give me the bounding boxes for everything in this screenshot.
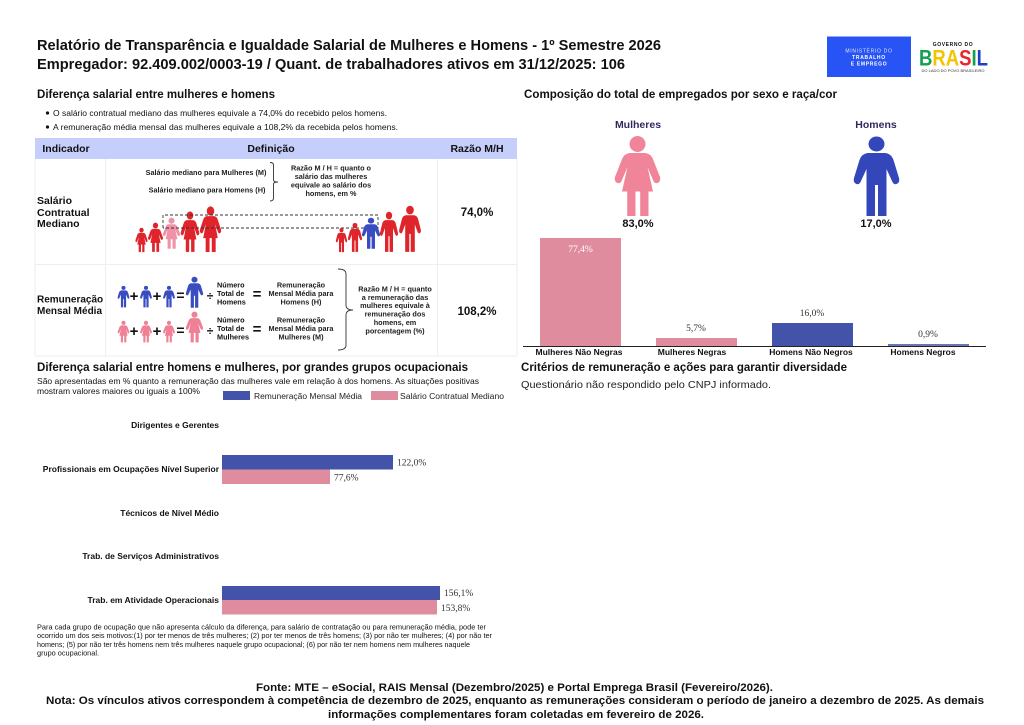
footnote: homens; (5) por não ter três homens nem três mulheres naquele grupo ocupacional; (6) por não ter nem homens nem mulheres naquele xyxy=(37,640,470,649)
formula: men: + xyxy=(130,288,139,305)
footer note: Fonte: MTE – eSocial, RAIS Mensal (Dezembro/2025) e Portal Emprega Brasil (Fevereiro/2026). xyxy=(256,682,773,694)
legend: Salário Contratual Mediano xyxy=(400,391,504,401)
bar chart: occupational groups: Profissionais em Ocupações Nível Superior xyxy=(43,464,220,474)
bar chart: composition by sex and race: Homens Negros xyxy=(890,347,956,357)
bar chart: occupational groups: Trab. em Atividade Operacionais xyxy=(88,595,219,605)
median comparison dashed lines xyxy=(163,215,378,228)
bar chart: composition by sex and race: 0,9% xyxy=(918,330,938,340)
bar chart: composition by sex and race: Mulheres Negras xyxy=(658,347,727,357)
text block: explanation: mostram valores maiores ou iguais a 100% xyxy=(37,386,201,396)
table header: Definição xyxy=(247,143,295,155)
definition: salário mediano: homens, em % xyxy=(305,189,357,198)
formula: women xyxy=(118,312,334,342)
icon: figures, men group xyxy=(336,206,421,252)
bar chart: composition by sex and race: Homens Não Negros xyxy=(769,347,853,357)
icon group: Homens share xyxy=(854,119,899,230)
logo: Governo do Brasil: DO LADO DO POVO BRASILEIRO xyxy=(922,68,984,73)
heading: composição: Composição do total de empregados por sexo e raça/cor xyxy=(524,89,838,101)
row label: Salário Contratual Mediano: Mediano xyxy=(37,218,80,230)
title xyxy=(37,38,661,73)
definition: razão remuneração: mulheres equivale à xyxy=(360,301,431,310)
definition: razão remuneração: a remuneração das xyxy=(362,293,428,302)
formula: women: ÷ xyxy=(207,324,214,338)
formula: women: Mensal Média para xyxy=(269,324,334,333)
formula: men xyxy=(118,277,334,308)
icon group: Mulheres share: 83,0% xyxy=(622,218,654,230)
text block: key findings xyxy=(46,108,398,132)
table header xyxy=(42,143,504,155)
definition: razão remuneração xyxy=(338,269,432,350)
row label: Remuneração Mensal Média: Remuneração xyxy=(37,294,103,306)
icon: figures, women group xyxy=(135,206,221,252)
logo: Ministério do Trabalho e Emprego xyxy=(827,36,911,77)
formula: women: = xyxy=(176,322,185,338)
bar chart: occupational groups: 153,8% xyxy=(441,604,470,614)
formula: women: Remuneração xyxy=(277,316,326,324)
value: 74,0%: 74,0% xyxy=(461,207,493,219)
formula: women: + xyxy=(130,323,139,340)
text block: explanation: São apresentadas em % quanto a remuneração das mulheres vale em relação à dos homens. As situações positivas xyxy=(37,376,479,386)
logo: Governo do Brasil: BRASIL xyxy=(919,46,988,70)
legend xyxy=(223,391,504,401)
bar chart: composition by sex and race: 16,0% xyxy=(800,309,824,319)
formula: men: Remuneração xyxy=(277,280,326,290)
formula: women: Mulheres (M) xyxy=(278,332,324,342)
formula: men: + xyxy=(153,288,162,305)
bar chart: composition by sex and race xyxy=(523,238,986,357)
logo: Ministério do Trabalho e Emprego: E EMPREGO xyxy=(851,62,887,68)
bar chart: composition by sex and race: Mulheres Não Negras xyxy=(536,347,623,357)
footer note: Nota: Os vínculos ativos correspondem à competência de dezembro de 2025, enquanto as remunerações consideram o período de janeiro a dezembro de 2025. As demais xyxy=(46,695,984,707)
bar chart: composition by sex and race: 5,7% xyxy=(686,324,706,334)
formula: men: ÷ xyxy=(207,289,214,303)
logo: Ministério do Trabalho e Emprego: MINISTÉRIO DO xyxy=(845,48,893,54)
formula: women: Total de xyxy=(217,324,244,333)
icon group: Mulheres share: Mulheres xyxy=(615,119,661,131)
formula: men: Homens (H) xyxy=(281,298,322,306)
row label: Salário Contratual Mediano: Contratual xyxy=(37,207,90,219)
definition: salário mediano: equivale ao salário dos xyxy=(291,180,371,190)
formula: men: = xyxy=(253,286,262,303)
definition: salário mediano xyxy=(146,162,372,201)
logo: Governo do Brasil: GOVERNO DO xyxy=(933,42,973,48)
footer note: informações complementares foram coletadas em fevereiro de 2026. xyxy=(328,709,704,721)
text block: explanation xyxy=(37,376,479,396)
row label: Remuneração Mensal Média: Mensal Média xyxy=(37,306,102,317)
bar chart: occupational groups: 77,6% xyxy=(334,474,359,484)
icon group: Homens share: Homens xyxy=(855,119,897,131)
table header: Razão M/H xyxy=(450,143,504,155)
definition: salário mediano: Razão M / H = quanto o xyxy=(291,164,372,172)
formula: men: = xyxy=(176,287,185,303)
formula: women: + xyxy=(153,323,162,340)
bar chart: occupational groups: 122,0% xyxy=(397,458,426,468)
definition: razão remuneração: Razão M / H = quanto xyxy=(358,284,432,294)
table header: Indicador xyxy=(42,143,90,155)
heading: critérios: Critérios de remuneração e ações para garantir diversidade xyxy=(521,362,847,374)
definition: salário mediano: Salário mediano para Mulheres (M) xyxy=(146,168,267,177)
panel: indicator table xyxy=(35,138,517,356)
formula: women: Mulheres xyxy=(217,332,249,342)
footnote xyxy=(37,622,493,658)
legend: Remuneração Mensal Média xyxy=(254,391,362,401)
bar chart: occupational groups: Técnicos de Nível Médio xyxy=(120,508,219,518)
heading: diferença salarial: Diferença salarial entre mulheres e homens xyxy=(37,89,275,101)
footer note xyxy=(46,682,984,721)
heading: grupos ocupacionais: Diferença salarial entre homens e mulheres, por grandes grupos ocupacionais xyxy=(37,362,468,374)
logo: Ministério do Trabalho e Emprego: TRABALHO xyxy=(852,55,886,61)
icon group: Mulheres share xyxy=(615,119,661,230)
definition: razão remuneração: homens, em xyxy=(374,318,417,327)
formula: women: Número xyxy=(217,316,245,324)
footnote: Para cada grupo de ocupação que não apresenta cálculo da diferença, para salário de contratação ou para remuneração média, pode ter xyxy=(37,622,487,632)
bar chart: composition by sex and race: 77,4% xyxy=(568,245,593,255)
formula: women: = xyxy=(253,321,262,338)
bar chart: occupational groups: Trab. de Serviços Administrativos xyxy=(82,551,219,561)
definition: razão remuneração: remuneração dos xyxy=(365,310,425,318)
formula: men: Total de xyxy=(217,289,244,298)
definition: salário mediano: salário das mulheres xyxy=(295,172,367,181)
footnote: grupo ocupacional. xyxy=(37,648,99,658)
row label: Salário Contratual Mediano: Salário xyxy=(37,195,72,207)
definition: razão remuneração: porcentagem (%) xyxy=(365,326,425,336)
bar chart: occupational groups xyxy=(43,420,473,614)
footnote: ocorrido um dos seis motivos:(1) por ter menos de três mulheres; (2) por ter menos de três homens; (3) por não ter mulheres; (4) por não ter xyxy=(37,631,493,640)
text block: key findings: A remuneração média mensal das mulheres equivale a 108,2% da recebida pelos homens. xyxy=(53,122,398,132)
definition: salário mediano: Salário mediano para Homens (H) xyxy=(149,186,266,194)
title: Relatório de Transparência e Igualdade Salarial de Mulheres e Homens - 1º Semestre 2026 xyxy=(37,38,661,54)
text block: key findings: O salário contratual mediano das mulheres equivale a 74,0% do recebido pelos homens. xyxy=(53,108,387,118)
title: Empregador: 92.409.002/0003-19 / Quant. de trabalhadores ativos em 31/12/2025: 106 xyxy=(37,57,625,73)
formula: men: Mensal Média para xyxy=(269,289,334,298)
formula: men: Homens xyxy=(217,298,246,306)
text block: questionário: Questionário não respondido pelo CNPJ informado. xyxy=(521,379,771,391)
value: 108,2%: 108,2% xyxy=(457,306,497,318)
bar chart: occupational groups: Dirigentes e Gerentes xyxy=(131,420,219,430)
formula: men: Número xyxy=(217,280,245,290)
bar chart: occupational groups: 156,1% xyxy=(444,589,473,599)
icon group: Homens share: 17,0% xyxy=(860,218,892,230)
